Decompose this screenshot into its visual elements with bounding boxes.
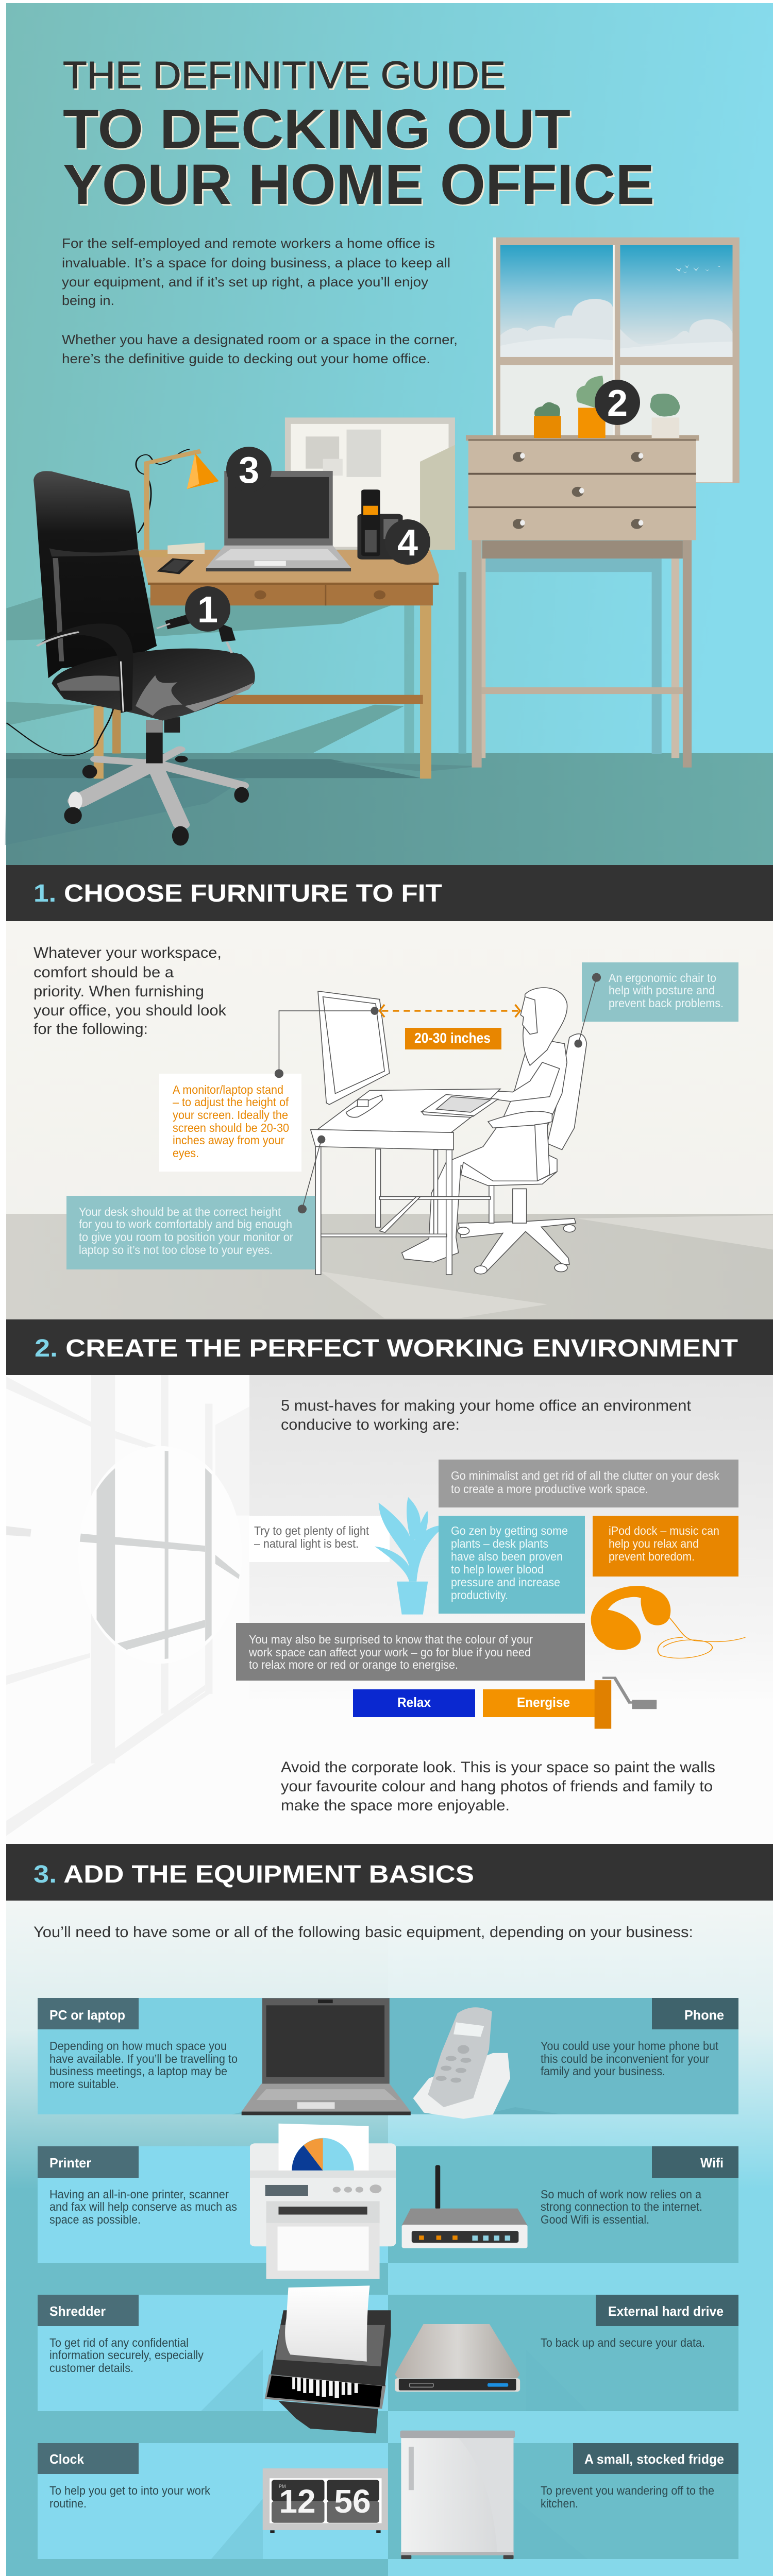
section 3 heading band: 3. ADD THE EQUIPMENT BASICS [33,1861,474,1888]
text Clock [49,2484,210,2510]
swatch: energise [483,1689,596,1717]
callout: desk: Your desk should be at the correct height [79,1205,281,1218]
box: natural light: Try to get plenty of light [254,1524,369,1537]
icon: printer [250,2124,396,2279]
label PC or laptop [38,1998,139,2029]
callout: screen distance [380,1005,520,1049]
section 1 heading band: 1. CHOOSE FURNITURE TO FIT [33,880,442,907]
section 2 closing text: your favourite colour and hang photos of friends and family to [281,1778,713,1795]
panel: section 1 furniture [6,865,773,1319]
box: minimalist [439,1460,738,1507]
item: PC or laptop [38,1998,411,2115]
text Shredder: customer details. [49,2361,133,2375]
section 1 intro text: for the following: [33,1021,148,1038]
callout: monitor stand: eyes. [173,1146,199,1160]
intro text: being in. [62,293,114,308]
title: YOUR HOME OFFICE [63,153,654,216]
chair seat [52,649,255,721]
item: Phone [413,1998,738,2119]
box: plants: to help lower blood [451,1563,544,1576]
line drawing: person at desk [311,988,586,1275]
callout: monitor stand [159,1074,301,1172]
text fridge: kitchen. [541,2497,578,2510]
callout: ergonomic chair [582,962,738,1022]
hero floor [6,753,773,865]
callout leader lines and dots [275,973,601,1213]
section 1 floor [6,1214,773,1319]
text Wifi: strong connection to the internet. [541,2200,702,2213]
callout: desk [66,1196,315,1269]
section 2 closing text: make the space more enjoyable. [281,1797,510,1814]
icon: paper shredder [265,2285,391,2433]
section 1 intro text [33,944,227,1038]
icon: headphones [591,1586,745,1658]
birds [676,264,721,273]
item: Fridge [400,2431,738,2559]
section 2 closing text: Avoid the corporate look. This is your space so paint the walls [281,1759,715,1776]
section 1 intro text: priority. When furnishing [33,983,204,1000]
chair base [64,717,249,845]
back wall [249,1375,773,1705]
item: Printer [38,2124,396,2279]
text PC or laptop: more suitable. [49,2077,119,2091]
text fridge: To prevent you wandering off to the [541,2484,714,2497]
box: colour: to relax more or red or orange to energise. [249,1658,458,1671]
text Phone: family and your business. [541,2064,665,2078]
section 3 intro text: You’ll need to have some or all of the following basic equipment, depending on your business: [33,1924,693,1941]
icon: flip clock: PM [279,2484,285,2489]
desk lamp [136,449,219,557]
text Shredder: To get rid of any confidential [49,2336,189,2349]
desk [94,550,439,778]
callout: monitor stand: A monitor/laptop stand [173,1083,283,1096]
text Shredder [49,2336,204,2375]
box: iPod dock: help you relax and [609,1537,699,1550]
chest of drawers [466,435,699,768]
label External hard drive: External hard drive [608,2303,724,2319]
text Clock: routine. [49,2497,87,2510]
box: plants: plants – desk plants [451,1537,548,1550]
item: Clock [38,2443,388,2533]
box: natural light [249,1516,390,1562]
desk outline [311,1089,500,1275]
section 1 heading band [6,865,773,921]
floor light patches [321,1215,773,1318]
label Clock: Clock [49,2451,85,2467]
section 2 heading band [6,1319,773,1375]
label External hard drive [596,2295,738,2326]
badge 1 [185,586,230,632]
box: plants: Go zen by getting some [451,1524,568,1537]
text PC or laptop [49,2039,238,2091]
badge 2 [595,380,640,425]
section 1 intro text: Whatever your workspace, [33,944,222,961]
icon: flip clock: 56 [334,2483,371,2520]
icon: mini fridge [400,2431,515,2559]
text Phone: You could use your home phone but [541,2039,719,2053]
section 2 intro text: conducive to working are: [281,1416,460,1433]
box: colour: work space can affect your work – go for blue if you need [248,1646,531,1659]
badge 4: 4 [397,522,418,564]
box: plants: have also been proven [451,1550,563,1563]
icon: hard drive [395,2324,520,2392]
panel: section 3 equipment [6,1844,773,2576]
box: minimalist: to create a more productive work space. [451,1482,648,1496]
box: colour [236,1623,585,1681]
section 3 checker background [6,1901,773,2576]
text Phone: this could be inconvenient for your [541,2052,709,2065]
section 2 intro text: 5 must-haves for making your home office an environment [281,1397,692,1414]
title [63,54,654,216]
pinboard on wall [285,417,455,550]
badge 2: 2 [607,383,628,424]
box: plants [439,1516,585,1614]
label Shredder [38,2295,139,2326]
callout: monitor stand: inches away from your [173,1133,284,1147]
box: minimalist: Go minimalist and get rid of all the clutter on your desk [451,1469,719,1482]
callout: monitor stand: – to adjust the height of [173,1095,289,1109]
dashed distance arrow [380,1005,520,1017]
icon: laptop [242,1998,411,2115]
intro text: For the self-employed and remote workers a home office is [62,235,435,251]
icon: flip clock: 12 [279,2483,316,2520]
text Printer [49,2188,237,2226]
callout: desk: to give you room to position your monitor or [79,1230,293,1244]
text PC or laptop: have available. If you’ll be travelling to [49,2052,238,2065]
box: iPod dock: iPod dock – music can [609,1524,719,1537]
floor shadows [5,759,483,845]
callout: monitor stand: screen should be 20-30 [173,1121,289,1134]
number badges [185,380,640,632]
icon: cordless phone [413,2007,510,2119]
swatch: relax [353,1689,475,1717]
icon: potted plant [375,1497,446,1615]
chair outline [458,1034,586,1274]
text Wifi: So much of work now relies on a [541,2188,701,2201]
text Printer: and fax will help conserve as much as [49,2200,237,2213]
label Clock [38,2443,139,2474]
text Wifi [541,2188,702,2226]
office chair [6,471,255,845]
intro text: Whether you have a designated room or a space in the corner, [62,332,458,347]
text Shredder: information securely, especially [49,2348,204,2362]
section 2 closing text [281,1759,715,1814]
label Printer: Printer [49,2155,91,2171]
box: plants: productivity. [451,1588,508,1602]
label fridge: A small, stocked fridge [584,2451,724,2467]
window with sky and clouds [493,238,740,483]
plants in pots [534,376,680,438]
laptop on desk [206,471,351,571]
title: TO DECKING OUT [63,97,570,160]
icon: flip clock [263,2468,388,2533]
badge 4 [385,519,430,565]
cordless phone [358,489,403,560]
badge 3: 3 [239,450,259,491]
swatch: energise: Energise [517,1694,570,1710]
text Clock: To help you get to into your work [49,2484,210,2497]
callout: desk: for you to work comfortably and big enough [79,1217,292,1231]
row tiles [38,1998,738,2559]
label Shredder: Shredder [49,2303,106,2319]
badge 3 [226,447,272,492]
item: Wifi [402,2146,738,2248]
intro text: invaluable. It’s a space for doing business, a place to keep all [62,255,450,270]
box: iPod dock: prevent boredom. [609,1550,695,1563]
20-30 inches tag: 20-30 inches [414,1030,491,1046]
monitor outline [318,991,390,1117]
box: natural light: – natural light is best. [254,1537,359,1550]
label Phone [652,1998,738,2029]
panel: section 2 working environment [6,1319,773,1844]
panel: hero home office scene [5,3,773,865]
section 1 intro text: your office, you should look [33,1002,227,1019]
label PC or laptop: PC or laptop [49,2007,125,2023]
text External hard drive: To back up and secure your data. [541,2336,705,2349]
label Wifi [652,2146,738,2178]
text Printer: space as possible. [49,2213,141,2226]
item: External hard drive [395,2295,738,2392]
icon: paint roller [595,1678,657,1729]
text PC or laptop: Depending on how much space you [49,2039,227,2053]
20-30 inches tag [405,1028,501,1049]
section 2 heading band: 2. CREATE THE PERFECT WORKING ENVIRONMENT [35,1335,738,1362]
text Phone [541,2039,719,2078]
bright window sketch [6,1375,249,1836]
title: THE DEFINITIVE GUIDE [63,54,506,96]
intro text: your equipment, and if it’s set up right, a place you’ll enjoy [62,274,428,290]
box: plants: pressure and increase [451,1575,560,1589]
section 2 intro text [281,1397,692,1433]
icon: wifi router [402,2165,528,2248]
section 2 room background [6,1375,773,1844]
badge 1: 1 [197,589,218,631]
callout: ergonomic chair: An ergonomic chair to [609,971,716,985]
text Printer: Having an all-in-one printer, scanner [49,2188,229,2201]
label Phone: Phone [684,2007,724,2023]
item: Shredder [38,2285,391,2433]
section 1 intro text: comfort should be a [33,964,174,981]
callout: ergonomic chair: help with posture and [609,984,715,997]
label Printer [38,2146,139,2178]
box: iPod dock [593,1516,738,1577]
chair back [33,471,157,678]
person outline [402,988,567,1262]
smartphone on desk [157,558,194,574]
chair armrests [37,623,133,713]
callout: desk: laptop so it’s not too close to your eyes. [79,1243,273,1257]
intro text [62,235,458,366]
hero wall background [6,3,773,753]
callout: ergonomic chair: prevent back problems. [609,996,724,1010]
section 1 background [6,921,773,1319]
label fridge [573,2443,738,2474]
text Wifi: Good Wifi is essential. [541,2213,649,2226]
intro text: here’s the definitive guide to decking out your home office. [62,351,430,366]
text PC or laptop: business meetings, a laptop may be [49,2064,227,2078]
section 3 heading band [6,1844,773,1901]
callout: monitor stand: your screen. Ideally the [173,1108,288,1122]
text fridge [541,2484,714,2510]
label Wifi: Wifi [700,2155,724,2171]
swatch: relax: Relax [397,1694,431,1710]
wall shadows [6,558,662,754]
box: colour: You may also be surprised to know that the colour of your [249,1633,533,1646]
